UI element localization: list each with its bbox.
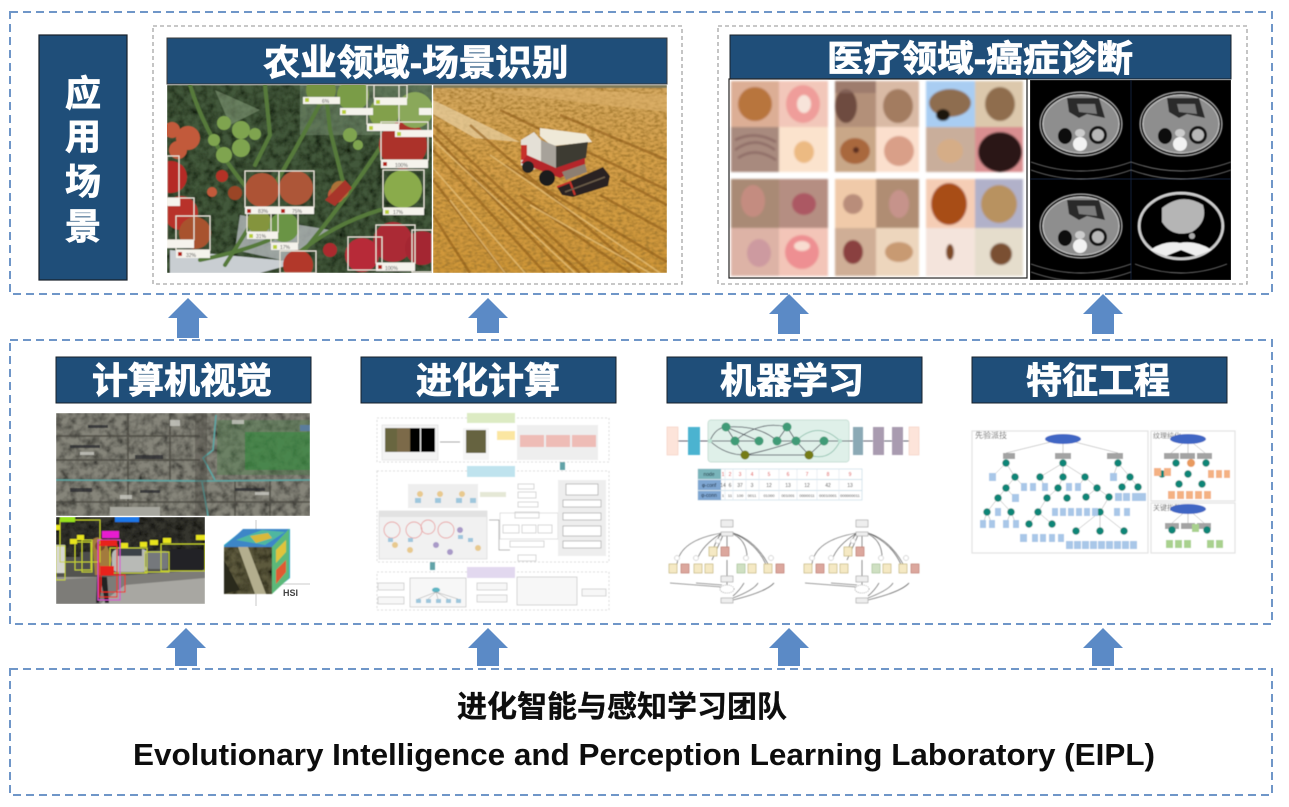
encoding table: 1	[722, 472, 725, 478]
arrow: up to scenario 3	[769, 294, 809, 334]
encoding table: 14	[720, 483, 726, 489]
encoding table: 8	[827, 472, 830, 478]
encoding table: 000000011	[840, 493, 861, 498]
image: hyperspectral cube: HSI	[283, 588, 298, 598]
heading: machine learning	[667, 357, 922, 403]
photo: CT scans	[1030, 80, 1231, 281]
diagram: neural architecture search	[667, 420, 919, 603]
section: preprocessing	[377, 413, 609, 470]
encoding table: 6	[787, 472, 790, 478]
encoding table: 01000	[763, 493, 775, 498]
heading: computer vision: 计算机视觉	[92, 360, 272, 401]
heading: application scenarios vertical: 景	[65, 206, 101, 247]
diagram: feature trees: 纹理纯化	[1153, 431, 1181, 440]
panel: laboratory	[10, 669, 1272, 795]
heading: application scenarios vertical: 用	[65, 116, 101, 157]
photo: tomato detection: 6%	[322, 99, 330, 105]
heading: agriculture: 农业领域-场景识别	[264, 42, 568, 83]
encoding table: 12	[766, 483, 772, 489]
encoding table: 00010001	[819, 493, 838, 498]
section: test	[377, 567, 609, 610]
panel: research directions	[10, 340, 1272, 624]
photo: tomato detection: 100%	[385, 266, 398, 272]
encoding table: 37	[737, 483, 743, 489]
section: GP search	[377, 466, 609, 570]
photo: tomato detection: 17%	[393, 210, 404, 216]
encoding table: 3	[739, 472, 742, 478]
encoding table: φ-conf	[702, 483, 717, 489]
heading: machine learning: 机器学习	[720, 360, 864, 401]
encoding table	[698, 469, 862, 500]
heading: evolutionary computation	[361, 357, 616, 403]
photo: tomato detection: 83%	[258, 209, 269, 215]
arrow: up to evolutionary computation	[468, 628, 508, 666]
image: satellite view	[56, 413, 310, 516]
heading: evolutionary computation: 进化计算	[416, 360, 560, 401]
team name in Chinese: 进化智能与感知学习团队	[457, 691, 787, 724]
arrow: up to vision	[166, 628, 206, 666]
photo: tomato detection	[167, 85, 432, 273]
encoding table: 4	[751, 472, 754, 478]
encoding table: node	[703, 472, 715, 478]
panel: application scenarios	[10, 12, 1272, 294]
photo: tomato detection: 17%	[280, 245, 291, 251]
image: traffic object detection	[56, 517, 205, 604]
photo: wheat harvester	[433, 85, 667, 273]
heading: feature engineering	[972, 357, 1227, 403]
encoding table: 12	[804, 483, 810, 489]
diagram: feature trees	[972, 430, 1235, 553]
photo: tomato detection: 31%	[256, 234, 267, 240]
arrow: up to feature engineering	[1083, 628, 1123, 666]
cell DAG left	[669, 520, 784, 603]
image: hyperspectral cube	[224, 520, 310, 606]
encoding table: 3	[751, 483, 754, 489]
encoding table: 100	[737, 493, 744, 498]
heading: application scenarios vertical	[39, 35, 127, 280]
heading: agriculture	[167, 38, 667, 84]
panel: medical cancer diagnosis	[718, 26, 1247, 284]
encoding table: 0011	[748, 493, 757, 498]
heading: application scenarios vertical: 场	[65, 161, 101, 202]
photo: skin lesion grid	[729, 79, 1027, 278]
encoding table: 2	[729, 472, 732, 478]
encoding table: 42	[825, 483, 831, 489]
heading: feature engineering: 特征工程	[1026, 360, 1170, 401]
team name in English: Evolutionary Intelligence and Perception Learning Laboratory (EIPL)	[133, 737, 1155, 772]
arrow: up to machine learning	[769, 628, 809, 666]
encoding table: 13	[847, 483, 853, 489]
heading: medical	[730, 35, 1231, 79]
encoding table: 6	[729, 483, 732, 489]
cell DAG right	[804, 520, 919, 603]
encoding table: 0000011	[799, 493, 815, 498]
photo: tomato detection: 100%	[395, 163, 408, 169]
arrow: up to scenario 1	[168, 298, 208, 338]
encoding table: 1	[722, 493, 725, 498]
cell network	[667, 420, 919, 462]
diagram: feature trees: 关键指数	[1153, 503, 1181, 512]
diagram: feature trees: 先验派技	[975, 430, 1007, 440]
encoding table: 9	[849, 472, 852, 478]
diagram: evolutionary computation flow	[377, 413, 609, 610]
heading: medical: 医疗领域-癌症诊断	[827, 38, 1133, 79]
encoding table: 11	[728, 493, 733, 498]
heading: computer vision	[56, 357, 311, 403]
arrow: up to scenario 4	[1083, 294, 1123, 334]
encoding table: 5	[768, 472, 771, 478]
photo: tomato detection: 32%	[186, 253, 197, 259]
encoding table: 13	[785, 483, 791, 489]
heading: application scenarios vertical: 应	[65, 73, 101, 114]
photo: tomato detection: 75%	[292, 209, 303, 215]
panel: agriculture scene recognition	[153, 26, 682, 284]
encoding table: φ-conn	[701, 493, 717, 499]
encoding table: 001001	[781, 493, 795, 498]
arrow: up to scenario 2	[468, 298, 508, 333]
encoding table: 7	[806, 472, 809, 478]
